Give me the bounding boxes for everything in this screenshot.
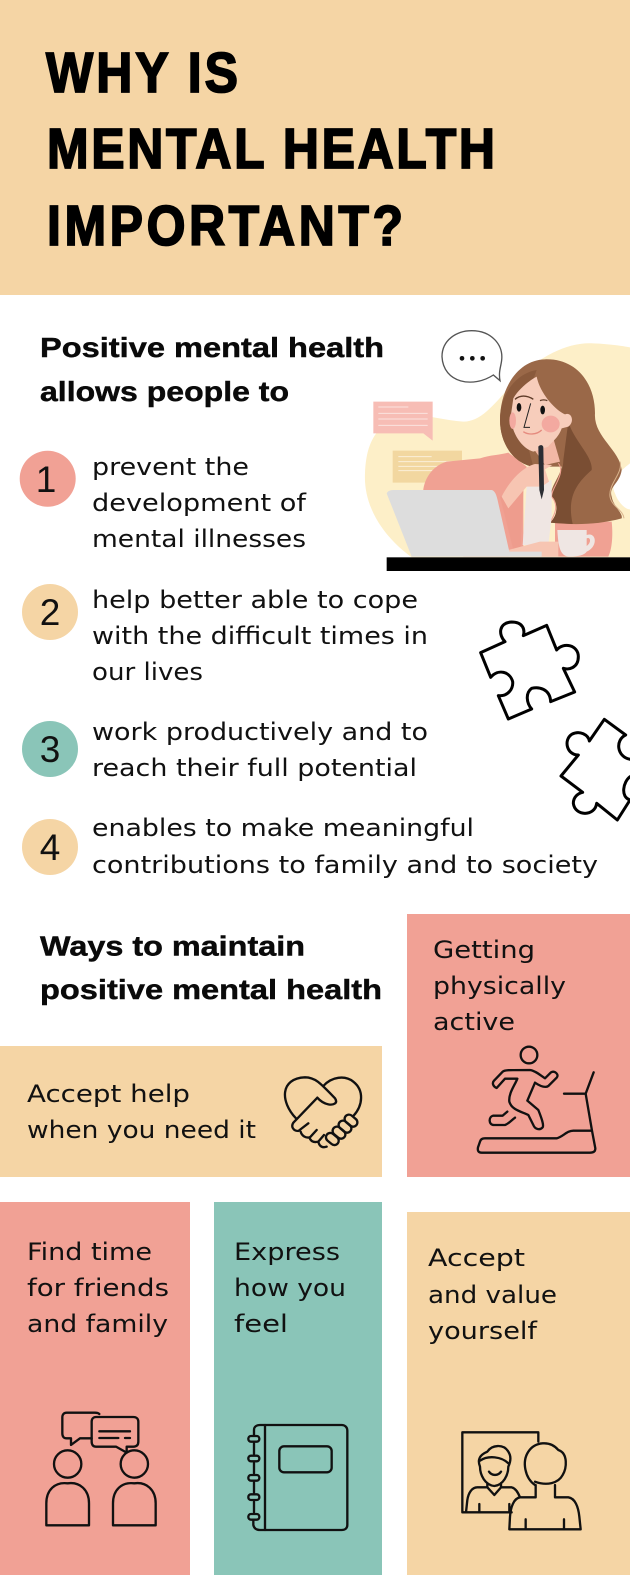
icon: person at mirror [462, 1432, 581, 1529]
card: express how you feel: feel [234, 1310, 288, 1338]
card: accept and value yourself: Accept [428, 1244, 525, 1272]
item 2: with the difficult times in [92, 622, 428, 650]
title: MENTAL HEALTH [47, 118, 495, 181]
heading: positive mental health [40, 332, 384, 407]
card: accept help: Accept help [27, 1080, 190, 1108]
title: IMPORTANT? [47, 195, 403, 258]
item 4: 4 [40, 827, 60, 868]
title: WHY IS [46, 42, 238, 105]
item 4: contributions to family and to society [92, 851, 598, 879]
card: getting physically active: active [433, 1008, 515, 1036]
item 2 [22, 584, 428, 686]
heading: ways to maintain: positive mental health [40, 974, 382, 1005]
card: accept help [0, 1046, 382, 1177]
heading: positive mental health: Positive mental health [40, 332, 384, 363]
item 1 [20, 451, 307, 553]
desk [387, 557, 630, 571]
item 3: 3 [40, 729, 60, 770]
item 2: help better able to cope [92, 586, 418, 614]
header panel [0, 0, 630, 295]
card: find time for friends and family: for friends [27, 1274, 169, 1302]
heading: ways to maintain [40, 930, 382, 1005]
icon: handshake heart [285, 1077, 361, 1147]
item 1: mental illnesses [92, 525, 306, 553]
item 3 [22, 718, 428, 782]
card: accept and value yourself: yourself [428, 1317, 538, 1345]
heading: ways to maintain: Ways to maintain [40, 930, 305, 962]
item 4: enables to make meaningful [92, 814, 474, 842]
item 1: 1 [36, 459, 56, 500]
card: find time for friends and family [0, 1202, 190, 1575]
item 2: our lives [92, 658, 203, 686]
card: express how you feel: Express [234, 1238, 340, 1266]
card: getting physically active: Getting [433, 936, 535, 964]
item 1: development of [92, 489, 307, 517]
item 1: prevent the [92, 453, 249, 481]
card: find time for friends and family: and family [27, 1310, 168, 1338]
title [46, 42, 495, 258]
item 2: 2 [40, 592, 60, 633]
card: accept help: when you need it [27, 1116, 256, 1144]
card: accept and value yourself: and value [428, 1281, 557, 1309]
item 4 [22, 814, 598, 879]
icon: two people talking [46, 1413, 156, 1525]
card: find time for friends and family: Find time [27, 1238, 152, 1266]
speech bubble [442, 331, 502, 382]
item 3: reach their full potential [92, 754, 417, 782]
icon: puzzle pieces [481, 622, 630, 820]
icon: treadmill runner [478, 1047, 595, 1153]
card: getting physically active [407, 914, 630, 1177]
card: express how you feel: how you [234, 1274, 346, 1302]
card: accept and value yourself [407, 1212, 630, 1575]
illustration: woman at laptop [365, 331, 630, 571]
card: getting physically active: physically [433, 972, 566, 1000]
heading: positive mental health: allows people to [40, 376, 289, 407]
item 3: work productively and to [92, 718, 428, 746]
icon: notebook [248, 1425, 347, 1530]
card: express how you feel [214, 1202, 382, 1575]
